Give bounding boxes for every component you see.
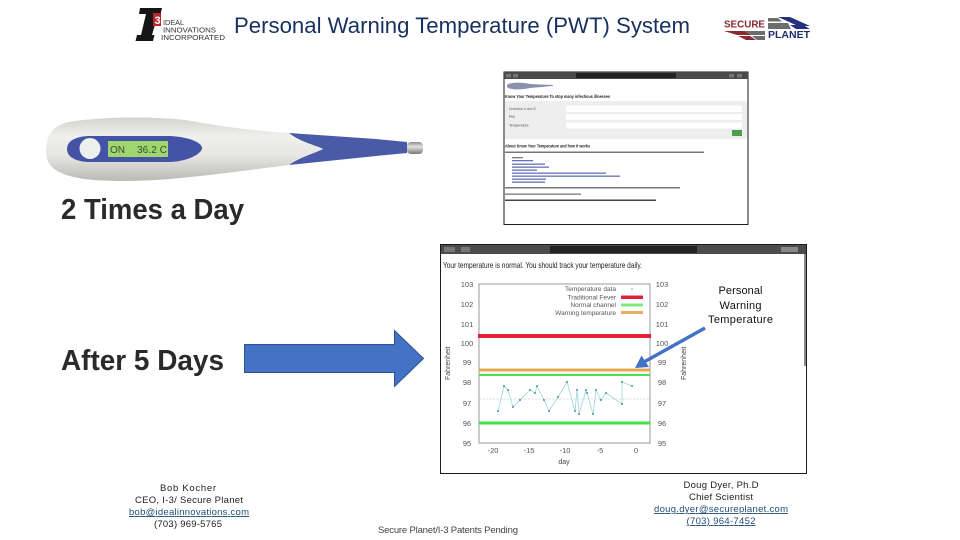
- contact: Doug Dyer: doug.dyer@secureplanet.com: [654, 504, 788, 515]
- right y axis labels: 98: [658, 378, 666, 387]
- text: 2 Times a Day: 2 Times a Day: [61, 194, 244, 226]
- right y axis labels: 100: [656, 339, 668, 348]
- left y axis labels: 98: [463, 378, 471, 387]
- arrow: callout pointer: [635, 328, 705, 368]
- fever line: [478, 334, 651, 338]
- chart legend: Temperature data: [565, 286, 616, 293]
- contact: Doug Dyer: Doug Dyer, Ph.D: [684, 480, 759, 491]
- about heading: About Know Your Temperature and how it works: [505, 144, 590, 150]
- left y axis labels: 99: [463, 358, 471, 367]
- x axis labels: -10: [560, 446, 570, 455]
- contact: Bob Kocher: [129, 483, 249, 530]
- line chart: [445, 280, 688, 466]
- thermometer thumbnail: [507, 83, 553, 89]
- left y axis labels: 95: [463, 439, 471, 448]
- logo: I3 Ideal Innovations: 3: [154, 15, 161, 27]
- left y axis labels: 100: [461, 339, 473, 348]
- icon: digital thermometer: ON: [110, 145, 125, 156]
- contact: Doug Dyer: Chief Scientist: [689, 492, 753, 503]
- form panel: Destination or start ID: [509, 107, 536, 111]
- left y axis labels: 101: [461, 320, 473, 329]
- logo: I3 Ideal Innovations: [136, 8, 226, 42]
- logo: I3 Ideal Innovations: INNOVATIONS: [163, 26, 216, 34]
- chart legend: [555, 286, 643, 317]
- x axis labels: -5: [597, 446, 603, 455]
- right y axis labels: [656, 280, 668, 448]
- logo: Secure Planet: PLANET: [768, 29, 811, 41]
- callout: Personal Warning Temperature: [708, 285, 773, 326]
- callout: Personal Warning Temperature: Personal: [718, 285, 762, 297]
- form heading: Know Your Temperature To stop many infectious illnesses: [505, 94, 610, 100]
- normal channel upper line: [479, 374, 650, 376]
- screenshot: temperature chart window: [440, 244, 806, 474]
- form panel: [505, 101, 747, 139]
- form panel: Temperature: [509, 124, 529, 128]
- contact: Doug Dyer: [654, 480, 788, 527]
- right y axis labels: 95: [658, 439, 666, 448]
- right y axis labels: 102: [656, 300, 668, 309]
- callout: Personal Warning Temperature: Warning: [720, 300, 762, 312]
- chart legend: Traditional Fever: [567, 294, 617, 302]
- arrow: after 5 days to chart: [244, 330, 424, 386]
- left y axis labels: 97: [463, 399, 471, 408]
- left y axis labels: 103: [461, 280, 473, 289]
- icon: digital thermometer: [46, 117, 423, 181]
- logo: I3 Ideal Innovations: INCORPORATED: [161, 33, 226, 42]
- chart legend: Warning temperature: [555, 310, 616, 317]
- x axis title: day: [558, 459, 570, 466]
- warning temperature line: [479, 368, 650, 372]
- right y axis labels: 101: [656, 320, 668, 329]
- right y axis labels: 96: [658, 419, 666, 428]
- left y axis labels: [461, 280, 473, 448]
- right y axis labels: 99: [658, 358, 666, 367]
- left y axis labels: 96: [463, 419, 471, 428]
- contact: Bob Kocher: CEO, I-3/ Secure Planet: [135, 495, 243, 506]
- chart legend: Normal channel: [570, 302, 617, 309]
- logo: Secure Planet: SECURE: [724, 18, 765, 30]
- x axis labels: -20: [488, 446, 498, 455]
- right y axis labels: 97: [658, 399, 666, 408]
- right y axis title: Fahrenheit: [681, 346, 688, 380]
- contact: Bob Kocher: (703) 969-5765: [154, 519, 222, 530]
- chart status message: Your temperature is normal. You should track your temperature daily.: [443, 260, 642, 270]
- form panel: PIN: [509, 115, 515, 119]
- left y axis title: Fahrenheit: [445, 346, 452, 380]
- callout: Personal Warning Temperature: Temperature: [708, 314, 773, 326]
- contact: Bob Kocher: Bob Kocher: [160, 483, 216, 494]
- data series: [497, 381, 633, 415]
- right y axis labels: 103: [656, 280, 668, 289]
- icon: digital thermometer: 36.2 C: [137, 145, 167, 156]
- contact: Doug Dyer: (703) 964-7452: [686, 516, 756, 527]
- logo: Secure Planet: [724, 17, 811, 41]
- x axis labels: -15: [524, 446, 534, 455]
- logo: I3 Ideal Innovations: IDEAL: [163, 18, 184, 27]
- contact: Bob Kocher: bob@idealinnovations.com: [129, 507, 249, 518]
- screenshot: temperature entry form: [504, 72, 748, 224]
- x axis labels: 0: [634, 446, 638, 455]
- text: After 5 Days: After 5 Days: [61, 345, 224, 377]
- title: Personal Warning Temperature (PWT) System: [234, 13, 690, 38]
- about text lines: [505, 152, 704, 201]
- left y axis labels: 102: [461, 300, 473, 309]
- footer: patents pending: Secure Planet/I-3 Patents Pending: [378, 525, 518, 536]
- x axis labels: [488, 446, 638, 455]
- normal channel lower line: [479, 422, 650, 424]
